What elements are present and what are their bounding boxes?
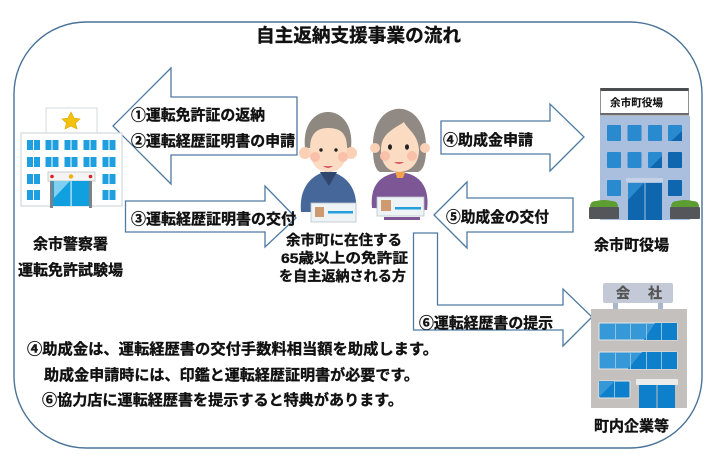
label: step 5: ⑤助成金の交付 (446, 208, 549, 226)
title: 自主返納支援事業の流れ (256, 25, 461, 46)
arrow: 1 and 2 to police (113, 68, 297, 184)
icon: town hall building (589, 88, 700, 220)
notes text block (27, 340, 438, 409)
arrow: 4 to town hall (441, 104, 584, 171)
icon: police building (21, 108, 122, 208)
label: step 3: ③運転経歴証明書の交付 (131, 210, 296, 228)
icon: elderly woman (370, 109, 430, 220)
label: target residents: 65歳以上の免許証 (281, 250, 408, 266)
label: step 2: ②運転経歴証明書の申請 (131, 132, 295, 150)
notes text block: ⑥協力店に運転経歴書を提示すると特典があります。 (42, 391, 403, 409)
sign text: 会 社 (616, 285, 662, 301)
notes text block: ④助成金は、運転経歴書の交付手数料相当額を助成します。 (27, 340, 438, 358)
label: step 6: ⑥運転経歴書の提示 (419, 314, 553, 332)
label: target residents (279, 232, 408, 284)
arrow: 6 to companies (414, 233, 592, 346)
label: local companies: 町内企業等 (594, 417, 669, 435)
label: step 1: ①運転免許証の返納 (131, 106, 265, 124)
icon: company building (591, 283, 687, 408)
arrow: 5 to resident (434, 182, 573, 248)
sign text: 余市町役場 (610, 96, 664, 109)
notes text block: 助成金申請時には、印鑑と運転経歴証明書が必要です。 (44, 366, 419, 384)
label: town hall: 余市町役場 (594, 236, 669, 254)
label: step 4: ④助成金申請 (443, 131, 533, 149)
label: license test center: 運転免許試験場 (18, 261, 123, 279)
label: target residents: 余市町に在住する (286, 232, 402, 248)
arrow: 3 to resident (126, 186, 296, 247)
icon: elderly man (299, 112, 357, 222)
label: police name: 余市警察署 (33, 235, 108, 253)
label: target residents: を自主返納される方 (279, 268, 406, 284)
